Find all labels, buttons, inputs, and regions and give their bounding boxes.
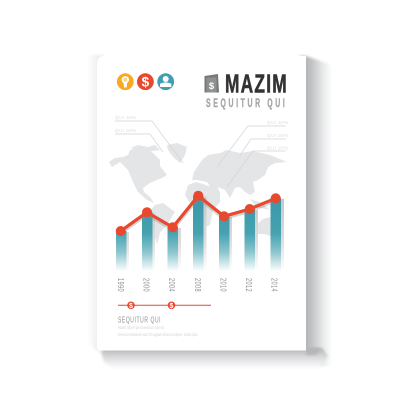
icon: light bulb <box>117 73 134 90</box>
title: MAZIM <box>225 69 288 98</box>
north america <box>109 148 167 203</box>
footer body <box>118 325 198 337</box>
eurasia <box>192 150 287 198</box>
slider marker one: $ <box>129 303 133 310</box>
year axis labels: 2004 <box>167 278 177 292</box>
footer heading: SEQUITUR QUI <box>118 316 161 325</box>
callout labels: QUI 30% <box>115 128 137 133</box>
year axis labels: 2014 <box>269 278 280 292</box>
icon: person <box>157 73 174 90</box>
year axis labels: 2008 <box>193 278 203 292</box>
year axis labels: 2000 <box>141 278 152 292</box>
callout labels: QUI 40% <box>115 115 137 120</box>
brochure page <box>97 56 306 350</box>
slider timeline <box>118 302 211 310</box>
bar chart <box>116 196 284 271</box>
footer body: Nam liber processus idem. <box>118 325 165 330</box>
icon row <box>117 73 174 90</box>
subtitle: SEQUITUR QUI <box>206 97 287 111</box>
icon: dollar: $ <box>142 74 150 90</box>
world map <box>109 143 287 245</box>
australia <box>255 217 280 237</box>
slider marker two: $ <box>170 303 174 310</box>
south america <box>148 203 175 245</box>
callout lines <box>115 121 286 187</box>
callout labels <box>115 115 289 150</box>
indonesia islands <box>250 199 270 210</box>
page shadow <box>87 55 332 369</box>
bars <box>116 231 126 271</box>
africa <box>185 182 220 228</box>
logo and title <box>204 69 288 111</box>
year axis labels: 2010 <box>218 278 229 292</box>
callout labels: QUI 30% <box>267 133 289 138</box>
line chart <box>116 191 281 236</box>
year axis labels: 2012 <box>244 278 254 292</box>
footer text block <box>118 316 198 337</box>
year axis labels: 1990 <box>116 278 126 292</box>
arctic islands <box>131 145 160 151</box>
year axis labels <box>116 278 280 292</box>
callout labels: QUI 20% <box>267 146 289 150</box>
callout labels: QUI 40% <box>267 120 289 125</box>
bar shadows <box>126 197 284 270</box>
footer body: Demonstraverunt feugiat ullamcorper suscipit. <box>118 332 198 337</box>
greenland <box>167 143 187 163</box>
icon: logo book: $ <box>209 81 215 92</box>
